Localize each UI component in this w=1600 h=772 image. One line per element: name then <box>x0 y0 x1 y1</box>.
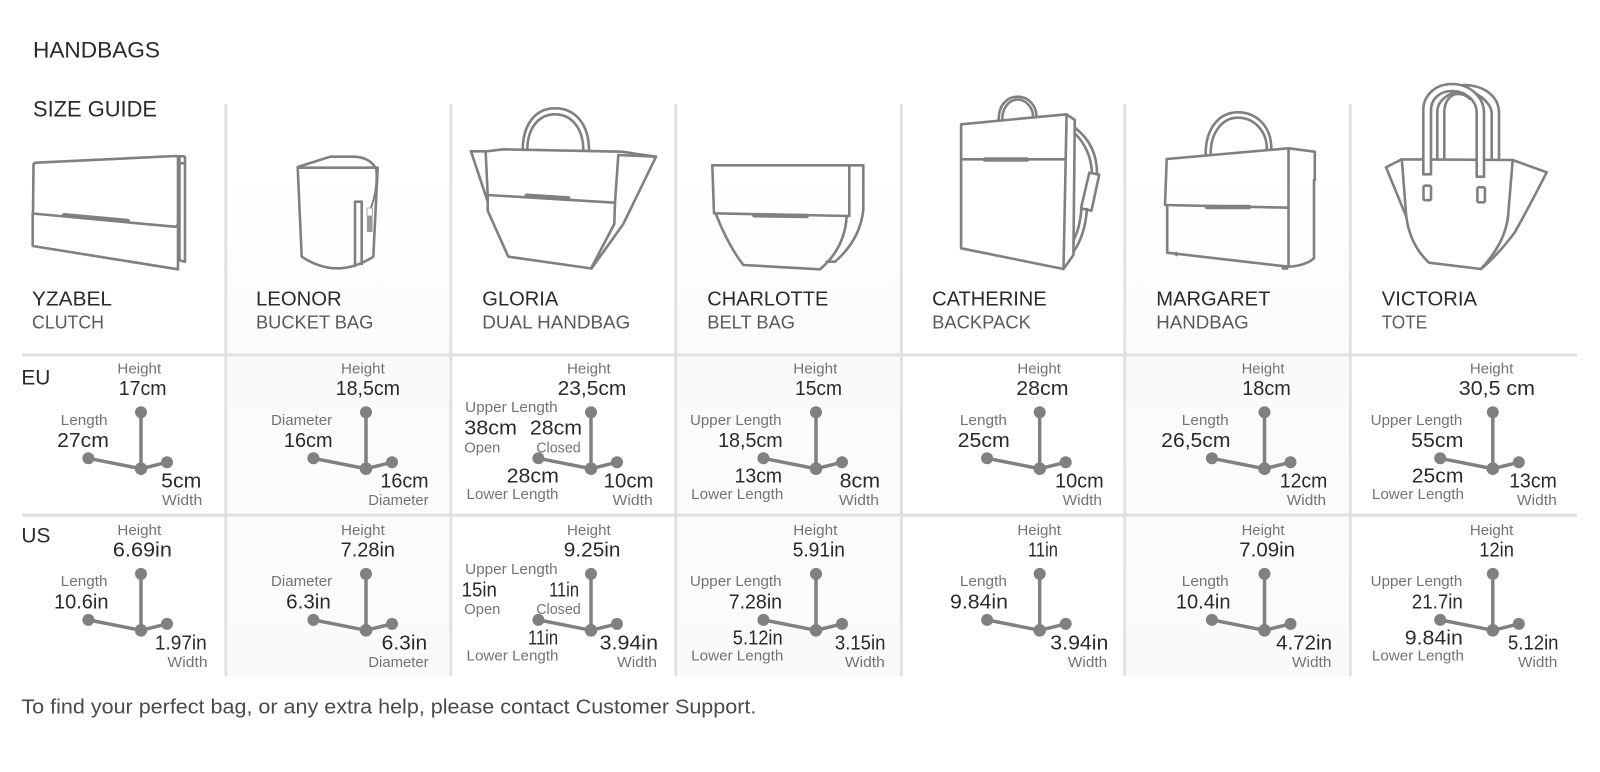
EU sizes: Gloria: Upper Length <box>465 399 558 416</box>
EU sizes: Victoria: Lower Length <box>1372 486 1464 503</box>
EU sizes: Leonor <box>271 360 429 509</box>
US sizes: Charlotte: 5.91in <box>793 540 845 562</box>
bag name: DUAL HANDBAG <box>482 312 630 332</box>
bag name: MARGARET <box>1156 287 1271 310</box>
bag name: CHARLOTTE <box>707 287 828 310</box>
bag name: CLUTCH <box>32 312 104 332</box>
US sizes: Gloria: 9.25in <box>564 540 620 562</box>
EU sizes: Margaret: 18cm <box>1242 378 1291 400</box>
bag name: LEONOR <box>256 287 342 310</box>
US sizes: Victoria: Upper Length <box>1371 573 1462 590</box>
US sizes: Gloria: Closed <box>536 601 581 618</box>
EU sizes: Leonor: 16cm <box>284 430 333 452</box>
diagram <box>1206 568 1296 637</box>
bag name <box>482 287 630 332</box>
diagram <box>757 406 848 475</box>
US sizes: Gloria: Open <box>464 601 500 618</box>
EU sizes: Charlotte: Lower Length <box>691 486 783 503</box>
US sizes: Leonor: Diameter <box>271 573 332 590</box>
US sizes: Charlotte: 5.12in <box>733 627 783 649</box>
EU sizes: Gloria: 38cm <box>464 418 517 440</box>
US sizes: Gloria: Lower Length <box>466 648 558 665</box>
bag name <box>32 287 112 332</box>
bag name: TOTE <box>1382 312 1427 332</box>
EU sizes: Victoria: 25cm <box>1412 466 1463 488</box>
US sizes: Leonor: 6.3in <box>286 592 331 614</box>
US sizes: Victoria: Lower Length <box>1372 648 1464 665</box>
US sizes: Gloria: Width <box>617 654 657 671</box>
EU sizes: Charlotte: Height <box>793 361 838 378</box>
US sizes: Victoria: 12in <box>1479 540 1514 562</box>
US sizes: Victoria <box>1371 522 1558 671</box>
US sizes: Victoria: Height <box>1470 522 1514 539</box>
title: HANDBAGS <box>33 37 160 62</box>
EU sizes: Gloria: Width <box>612 492 653 509</box>
US sizes: Leonor: 7.28in <box>341 540 395 562</box>
US sizes: Margaret: 10.4in <box>1176 592 1230 614</box>
bag name: BACKPACK <box>932 312 1031 332</box>
EU sizes: Leonor: 18,5cm <box>336 378 400 400</box>
US sizes: Catherine: Width <box>1068 654 1107 671</box>
diagram <box>532 406 623 475</box>
bag name: VICTORIA <box>1382 287 1477 310</box>
US sizes: Victoria: Width <box>1518 654 1557 671</box>
EU sizes: Yzabel: 5cm <box>161 471 201 493</box>
US sizes: Yzabel: Height <box>117 522 162 539</box>
US sizes: Margaret: 4.72in <box>1276 633 1332 655</box>
EU sizes: Margaret: Length <box>1182 412 1229 429</box>
icon: clutch bag <box>33 156 185 269</box>
EU sizes: Gloria: Lower Length <box>466 486 558 503</box>
EU sizes: Victoria: Height <box>1470 361 1514 378</box>
US sizes: Yzabel <box>54 522 208 671</box>
bag name: BELT BAG <box>707 312 795 332</box>
US sizes: Charlotte: Width <box>845 654 885 671</box>
US sizes: Gloria: Height <box>567 522 612 539</box>
diagram <box>307 568 398 637</box>
EU sizes: Margaret <box>1161 360 1327 509</box>
EU sizes: Catherine: Length <box>960 412 1007 429</box>
EU sizes: Charlotte: 18,5cm <box>718 430 783 452</box>
EU sizes: Catherine: 10cm <box>1055 471 1104 493</box>
US sizes: Leonor: Diameter <box>368 654 429 671</box>
US sizes: Yzabel: 6.69in <box>113 540 172 562</box>
bag name <box>707 287 828 332</box>
US sizes: Margaret: Length <box>1182 573 1229 590</box>
EU sizes: Yzabel: 17cm <box>119 378 166 400</box>
US sizes: Charlotte: Height <box>793 522 838 539</box>
panel: Victoria tote <box>1382 84 1547 332</box>
panel: Yzabel clutch <box>32 156 185 332</box>
EU sizes: Catherine: Height <box>1017 361 1062 378</box>
bag name: BUCKET BAG <box>256 312 373 332</box>
US sizes: Yzabel: Width <box>167 654 208 671</box>
diagram <box>981 568 1072 637</box>
US sizes: Leonor: Height <box>341 522 386 539</box>
EU sizes: Yzabel: Width <box>162 492 202 509</box>
EU sizes: Yzabel: 27cm <box>57 430 109 452</box>
title <box>33 37 160 122</box>
bag name: YZABEL <box>32 287 112 310</box>
US sizes: Gloria: 15in <box>462 579 497 601</box>
panel: Catherine backpack <box>932 97 1099 332</box>
US sizes: Gloria: Upper Length <box>465 561 558 578</box>
bag name <box>256 287 373 332</box>
US sizes: Margaret: Height <box>1242 522 1285 539</box>
footer note: To find your perfect bag, or any extra help, please contact Customer Support. <box>21 697 756 719</box>
US sizes: Gloria: 11in <box>528 627 558 649</box>
EU sizes: Charlotte <box>690 360 880 509</box>
icon: handbag <box>1165 112 1315 268</box>
US sizes: Charlotte: 7.28in <box>729 592 782 614</box>
EU sizes: Catherine: 28cm <box>1016 378 1068 400</box>
EU sizes: Leonor: Diameter <box>368 492 429 509</box>
row label: EU: EU <box>21 366 50 389</box>
EU sizes: Catherine: 25cm <box>958 430 1010 452</box>
diagram <box>981 406 1072 475</box>
EU sizes: Charlotte: 8cm <box>840 471 880 493</box>
EU sizes: Victoria: Width <box>1517 492 1557 509</box>
EU sizes: Leonor: Height <box>341 361 386 378</box>
EU sizes: Charlotte: 13cm <box>735 466 782 488</box>
EU sizes: Catherine <box>958 360 1104 509</box>
EU sizes: Margaret: Width <box>1287 492 1326 509</box>
diagram <box>532 568 623 637</box>
icon: tote bag <box>1386 84 1547 269</box>
diagram <box>82 568 173 637</box>
EU sizes: Gloria: Height <box>567 361 612 378</box>
US sizes: Charlotte: Lower Length <box>691 648 783 665</box>
US sizes: Yzabel: 1.97in <box>155 633 207 655</box>
EU sizes: Yzabel: Length <box>61 412 108 429</box>
EU sizes: Gloria: 28cm <box>530 418 582 440</box>
bag name: HANDBAG <box>1156 312 1249 332</box>
EU sizes: Catherine: Width <box>1063 492 1102 509</box>
EU sizes: Gloria: 28cm <box>507 466 559 488</box>
US sizes: Victoria: 21.7in <box>1412 592 1463 614</box>
icon: bucket bag <box>298 157 378 268</box>
EU sizes: Charlotte: Upper Length <box>690 412 782 429</box>
icon: belt bag <box>712 165 863 269</box>
diagram <box>307 406 398 475</box>
icon: dual handbag <box>471 108 656 268</box>
US sizes: Catherine <box>950 522 1108 671</box>
EU sizes: Victoria: 55cm <box>1411 430 1463 452</box>
row label: US: US <box>21 525 50 548</box>
EU sizes: Gloria: Open <box>464 440 500 457</box>
panel: Gloria dual handbag <box>471 108 656 332</box>
US sizes: Gloria <box>462 522 658 671</box>
EU sizes: Margaret: 12cm <box>1280 471 1327 493</box>
EU sizes: Leonor: 16cm <box>380 471 429 493</box>
bag name: CATHERINE <box>932 287 1047 310</box>
panel: Margaret handbag <box>1156 112 1315 332</box>
EU sizes: Margaret: 26,5cm <box>1161 430 1230 452</box>
EU sizes: Victoria: 30,5 cm <box>1459 378 1535 400</box>
diagram <box>1434 568 1525 637</box>
bag name <box>1156 287 1271 332</box>
EU sizes: Victoria <box>1371 360 1557 509</box>
bag name <box>932 287 1047 332</box>
EU sizes: Gloria: 10cm <box>604 471 654 493</box>
US sizes: Charlotte: Upper Length <box>690 573 782 590</box>
EU sizes: Leonor: Diameter <box>271 412 332 429</box>
EU sizes: Yzabel <box>57 360 202 509</box>
EU sizes: Gloria <box>464 360 654 509</box>
US sizes: Catherine: 11in <box>1028 540 1058 562</box>
US sizes: Gloria: 11in <box>549 579 579 601</box>
bag name: GLORIA <box>482 287 559 310</box>
EU sizes: Gloria: 23,5cm <box>558 378 626 400</box>
panel: Leonor bucket bag <box>256 157 378 332</box>
US sizes: Catherine: 9.84in <box>950 592 1008 614</box>
US sizes: Charlotte <box>690 522 885 671</box>
US sizes: Yzabel: Length <box>61 573 108 590</box>
US sizes: Gloria: 3.94in <box>600 633 658 655</box>
EU sizes: Charlotte: Width <box>839 492 879 509</box>
icon: backpack <box>961 97 1099 269</box>
US sizes: Victoria: 9.84in <box>1405 627 1463 649</box>
US sizes: Leonor <box>271 522 429 671</box>
panel: Charlotte belt bag <box>707 165 863 332</box>
US sizes: Margaret: 7.09in <box>1239 540 1295 562</box>
diagram <box>82 406 173 475</box>
EU sizes: Charlotte: 15cm <box>795 378 842 400</box>
US sizes: Catherine: 3.94in <box>1050 633 1108 655</box>
US sizes: Victoria: 5.12in <box>1508 633 1558 655</box>
diagram <box>757 568 848 637</box>
bag name <box>1382 287 1477 332</box>
title: SIZE GUIDE <box>33 97 157 122</box>
diagram <box>1206 406 1296 475</box>
US sizes: Catherine: Height <box>1017 522 1062 539</box>
US sizes: Margaret: Width <box>1292 654 1331 671</box>
EU sizes: Margaret: Height <box>1242 361 1285 378</box>
EU sizes: Gloria: Closed <box>536 440 581 457</box>
US sizes: Margaret <box>1176 522 1332 671</box>
US sizes: Leonor: 6.3in <box>382 633 427 655</box>
US sizes: Charlotte: 3.15in <box>835 633 885 655</box>
US sizes: Yzabel: 10.6in <box>54 592 108 614</box>
EU sizes: Victoria: Upper Length <box>1371 412 1462 429</box>
EU sizes: Yzabel: Height <box>117 361 162 378</box>
US sizes: Catherine: Length <box>960 573 1007 590</box>
diagram <box>1434 406 1525 475</box>
EU sizes: Victoria: 13cm <box>1509 471 1557 493</box>
